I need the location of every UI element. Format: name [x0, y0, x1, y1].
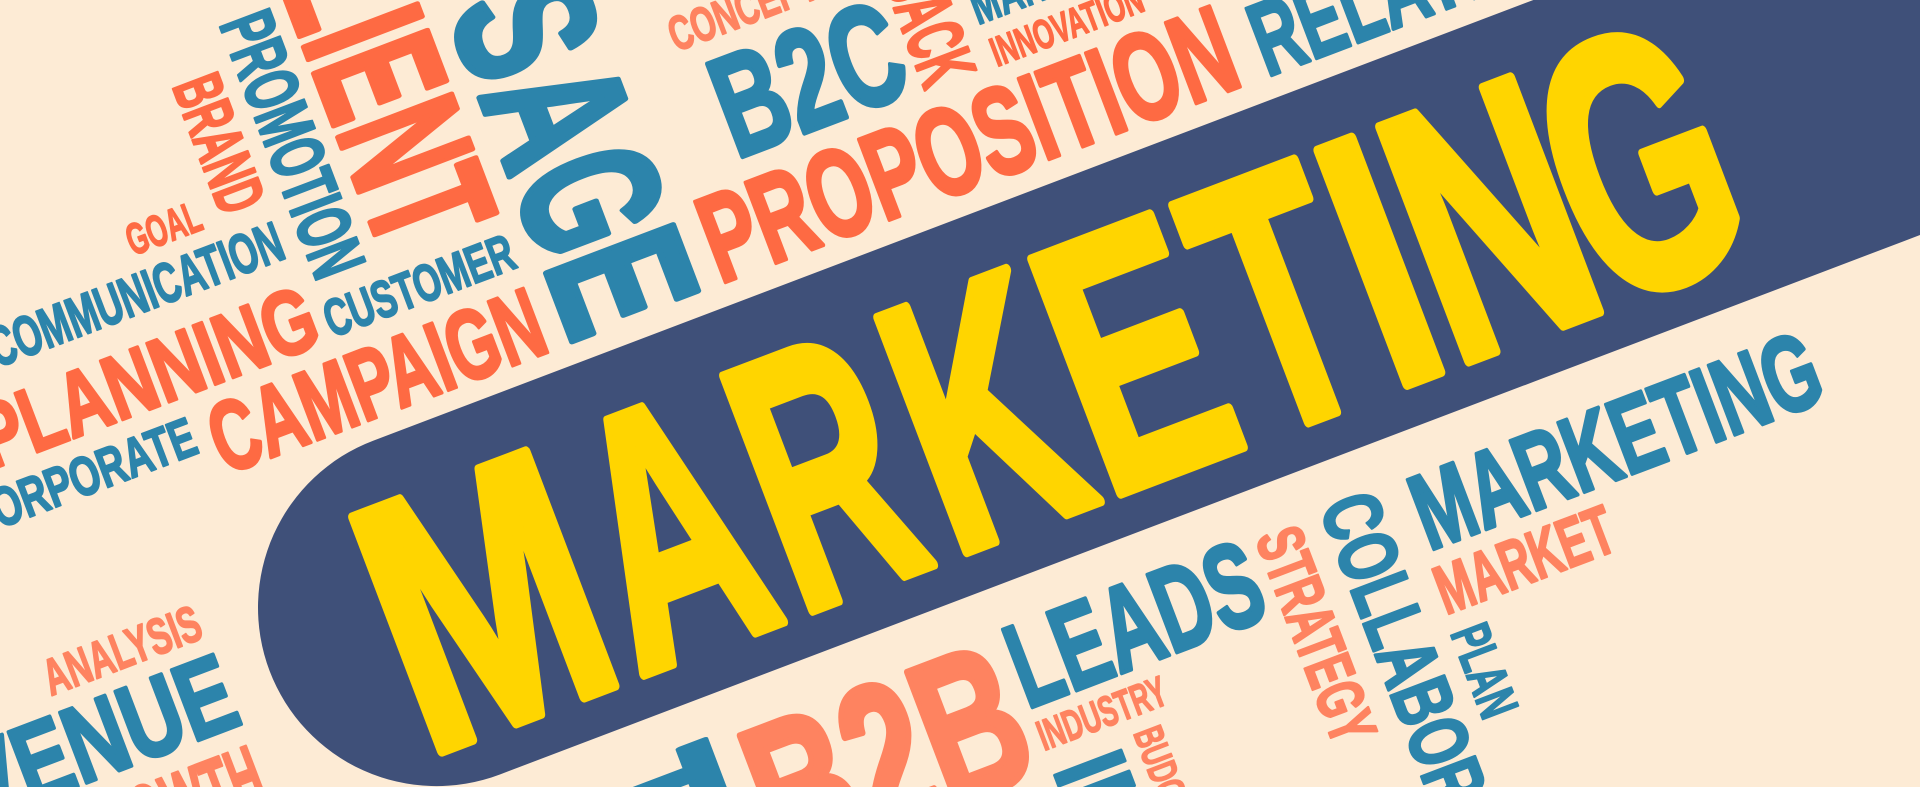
word: GOAL: GOAL [119, 192, 209, 265]
word: MESSAGE: E [504, 201, 740, 362]
main heading: MARKETING: R [681, 255, 966, 688]
word: MESSAGE: G [472, 117, 709, 281]
word: PLAN: PLAN [1439, 615, 1530, 726]
word: MARKET: MARKET [1424, 491, 1625, 629]
word: MESSAGE: A [439, 31, 677, 195]
word: ANALYSIS: ANALYSIS [35, 594, 209, 706]
word: PROMOTION: PROMOTION [203, 0, 381, 289]
main heading: MARKETING: I [1273, 58, 1485, 463]
word: LEADS: LEADS [989, 515, 1281, 733]
word: CAMPAIGN: CAMPAIGN [193, 268, 560, 496]
word: INDUSTRY: INDUSTRY [1031, 668, 1174, 760]
word: BRAND: BRAND [158, 64, 280, 223]
main heading: MARKETING: K [835, 192, 1130, 629]
main heading: MARKETING: A [521, 311, 817, 749]
word: CUSTOMER: CUSTOMER [315, 223, 523, 349]
main heading: MARKETING: E [988, 135, 1280, 571]
main heading: MARKETING: T [1141, 85, 1414, 513]
